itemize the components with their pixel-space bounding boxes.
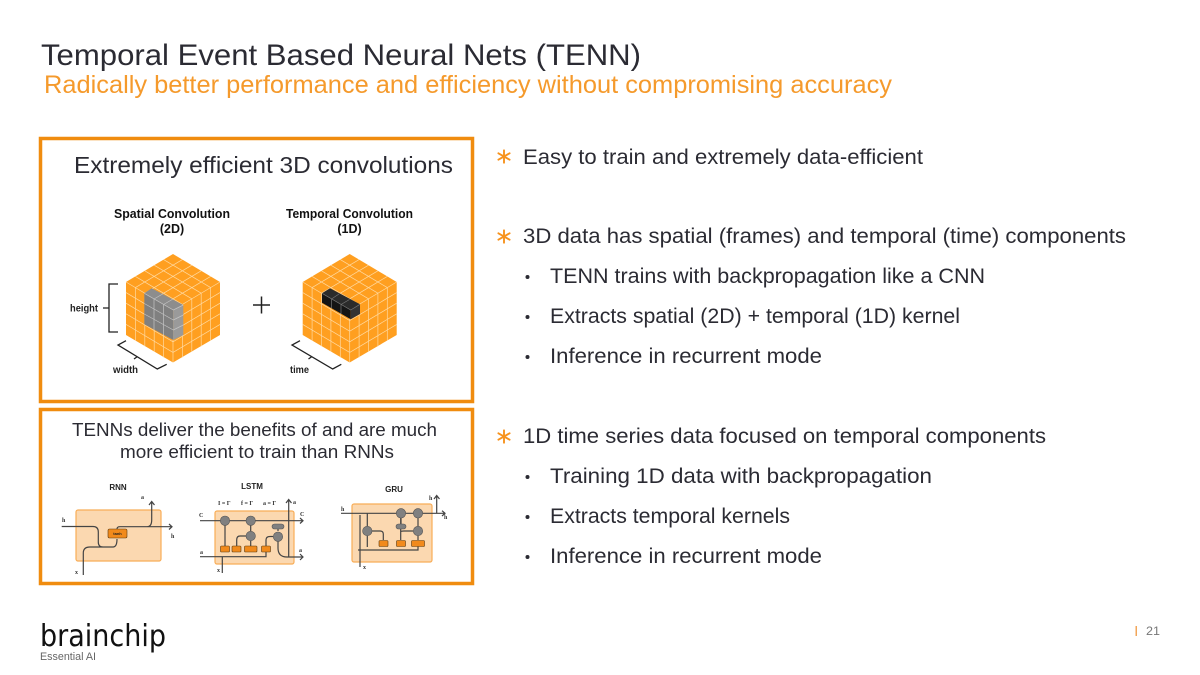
title: Temporal Event Based Neural Nets (TENN) <box>41 39 641 72</box>
spatial cube with grey kernel <box>126 254 220 362</box>
bullet group: 1D time series: Inference in recurrent mode <box>550 545 822 568</box>
RNN diagram: h <box>62 518 66 524</box>
temporal convolution heading <box>286 207 413 236</box>
panel heading: Extremely efficient 3D convolutions <box>74 152 453 178</box>
spatial convolution heading <box>114 207 230 236</box>
LSTM diagram: I = Γ <box>218 501 231 507</box>
bullet group: 1D time series: Training 1D data with backpropagation <box>550 465 932 488</box>
GRU diagram <box>341 485 448 571</box>
LSTM diagram: a <box>299 548 302 554</box>
panel text: more efficient to train than RNNs <box>120 442 394 462</box>
logo: brainchip: brainchip <box>40 619 166 654</box>
temporal convolution heading: Temporal Convolution <box>286 207 413 221</box>
time bracket and label <box>290 341 341 376</box>
panel frame <box>40 410 472 584</box>
GRU diagram: h <box>341 507 345 513</box>
GRU diagram: x <box>363 565 366 571</box>
bullet: easy to train: Easy to train and extremely data-efficient <box>523 146 923 169</box>
GRU diagram: GRU <box>385 485 403 494</box>
LSTM diagram: C <box>300 512 304 518</box>
time bracket and label: time <box>290 365 309 376</box>
panel text <box>72 420 437 462</box>
height bracket and label: height <box>70 304 99 314</box>
RNN diagram: a <box>141 495 144 501</box>
RNN diagram: tanh <box>113 531 122 536</box>
bullet group: 3D data <box>498 225 1126 368</box>
height bracket and label <box>70 284 118 332</box>
panel: 3D convolutions <box>40 138 472 402</box>
GRU diagram: h <box>444 515 448 521</box>
width bracket and label: width <box>112 365 138 376</box>
panel text: TENNs deliver the benefits of and are much <box>72 420 437 440</box>
bullet group: 3D data: Inference in recurrent mode <box>550 345 822 368</box>
LSTM diagram: LSTM <box>241 482 263 491</box>
LSTM diagram: a <box>293 500 296 506</box>
bullet group: 3D data: Extracts spatial (2D) + temporal (1D) kernel <box>550 305 960 328</box>
temporal cube with black kernel <box>303 254 397 362</box>
panel: RNN comparison <box>40 410 472 584</box>
plus sign <box>253 296 270 314</box>
bullet group: 3D data: TENN trains with backpropagation like a CNN <box>550 265 985 288</box>
spatial convolution heading: Spatial Convolution <box>114 207 230 221</box>
bullet group: 1D time series: 1D time series data focused on temporal components <box>523 425 1046 448</box>
LSTM diagram: C <box>199 513 203 519</box>
LSTM diagram: a = Γ <box>263 501 276 507</box>
LSTM diagram <box>199 482 304 574</box>
bullet group: 1D time series <box>498 425 1046 568</box>
page number: 21 <box>1146 624 1160 638</box>
panel frame <box>40 138 472 402</box>
LSTM diagram: f = Γ <box>241 501 253 507</box>
subtitle: Radically better performance and efficiency without compromising accuracy <box>44 71 892 99</box>
RNN diagram: RNN <box>109 483 127 492</box>
RNN diagram: x <box>75 570 78 576</box>
LSTM diagram: x <box>217 568 220 574</box>
RNN diagram: h <box>171 534 175 540</box>
width bracket and label <box>112 341 167 376</box>
page number <box>1136 624 1160 638</box>
GRU diagram: h <box>429 496 433 502</box>
bullet group: 1D time series: Extracts temporal kernels <box>550 505 790 528</box>
logo: brainchip: Essential AI <box>40 651 96 663</box>
temporal convolution heading: (1D) <box>337 222 362 236</box>
LSTM diagram: a <box>200 550 203 556</box>
spatial convolution heading: (2D) <box>160 222 184 236</box>
bullet group: 3D data: 3D data has spatial (frames) and temporal (time) components <box>523 225 1126 248</box>
RNN diagram <box>62 483 175 576</box>
